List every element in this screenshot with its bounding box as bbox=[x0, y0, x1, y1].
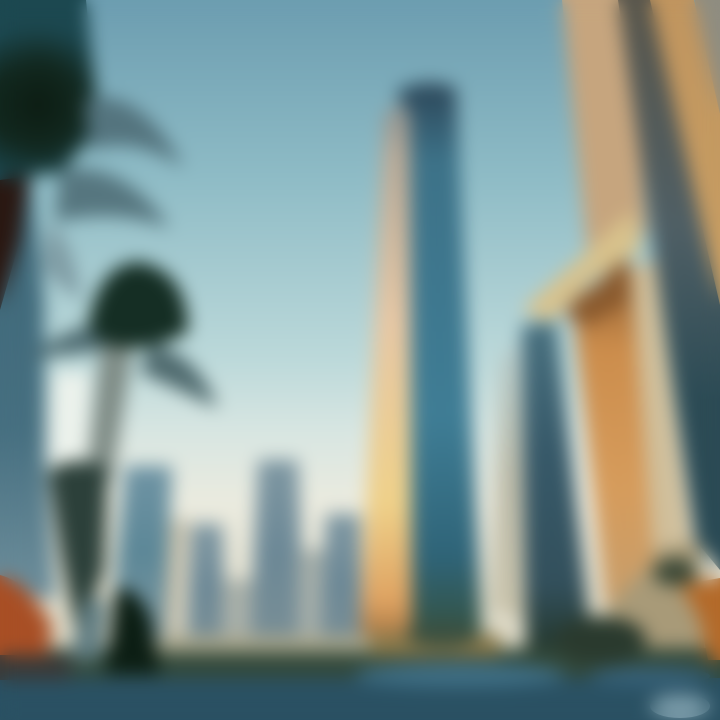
frond: left bbox=[30, 325, 105, 358]
brown soffit under beam bbox=[562, 258, 630, 325]
tan diagonal band bbox=[646, 0, 720, 400]
far tan wall bbox=[562, 0, 646, 280]
tower: golden left face bbox=[360, 90, 414, 640]
lower foliage bbox=[48, 461, 108, 640]
brown trunk bbox=[0, 165, 30, 310]
palm: lower left bbox=[48, 461, 160, 674]
golden crossbeam bbox=[522, 210, 642, 322]
pale wall behind column bbox=[625, 260, 690, 620]
tower: blue right face bbox=[396, 83, 482, 640]
bright sky gap left bbox=[50, 372, 90, 462]
frond: right drooping bbox=[140, 345, 218, 408]
right-hand structure bbox=[492, 0, 720, 660]
left tower bbox=[110, 466, 172, 640]
frond: lower bbox=[42, 225, 82, 300]
lower tan wall near planter bbox=[610, 540, 705, 660]
lighter blue reflections bbox=[355, 663, 565, 687]
palm crown bbox=[0, 0, 100, 180]
palm: large upper left bbox=[0, 0, 184, 300]
palm: mid left bbox=[30, 262, 218, 480]
frond: middle bbox=[55, 169, 170, 228]
dark blue lower tower bbox=[522, 322, 592, 650]
bottom-right orange planter bbox=[406, 558, 720, 664]
distant towers bbox=[158, 460, 362, 650]
orange foreground shape bbox=[0, 575, 70, 680]
right blue reflection bbox=[590, 667, 710, 685]
pale highlight bottom right bbox=[650, 694, 710, 718]
pale left slab bbox=[492, 330, 530, 620]
ground vegetation band bbox=[0, 634, 720, 680]
ground foreground bbox=[0, 663, 720, 720]
dark diagonal strut bbox=[618, 0, 720, 570]
dark lower trunk bbox=[106, 589, 160, 674]
pale grey corner facade bbox=[695, 0, 720, 190]
frond: upper bbox=[85, 98, 184, 168]
lower trunk bbox=[70, 600, 106, 660]
palm crown bbox=[88, 262, 188, 348]
palm trunk bbox=[86, 340, 134, 480]
left tree mass bbox=[0, 165, 56, 600]
central tower bbox=[360, 83, 482, 640]
orange column bbox=[572, 262, 654, 610]
water band bbox=[0, 678, 720, 720]
blue-grey left edge bbox=[0, 170, 56, 600]
